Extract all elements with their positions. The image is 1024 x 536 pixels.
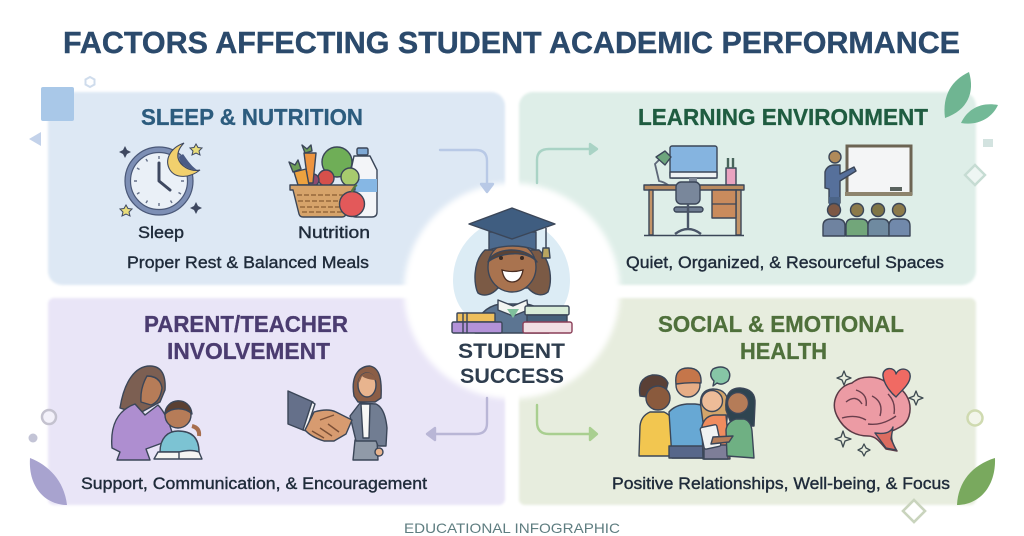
leaves: top right: [944, 72, 998, 124]
icon: basket of food and milk: [289, 145, 377, 217]
panel: social and emotional health background: [519, 298, 976, 505]
student success label: SUCCESS: [460, 365, 564, 388]
description: social and emotional health: Positive Relationships, Well-being, & Focus: [612, 474, 950, 493]
arrow: sleep to student: [440, 150, 493, 192]
heading: social and emotional health: [658, 311, 904, 364]
student success label: [458, 340, 565, 388]
student success label: STUDENT: [458, 340, 565, 363]
icon: clock and moon: [119, 143, 202, 216]
description: parent teacher involvement: Support, Communication, & Encouragement: [81, 474, 427, 493]
arrow: student to learning environment: [537, 144, 597, 183]
heading: parent teacher involvement: PARENT/TEACHER: [144, 311, 348, 337]
icon: brain with heart: [834, 369, 923, 456]
heading: learning environment: LEARNING ENVIRONMENT: [638, 104, 928, 130]
student illustration: [469, 208, 555, 333]
central white circle: [404, 183, 620, 399]
central student figure: [452, 208, 572, 388]
footer label: EDUCATIONAL INFOGRAPHIC: [404, 520, 620, 536]
leaf: bottom left purple: [30, 458, 67, 505]
heading: social and emotional health: SOCIAL & EMOTIONAL: [658, 311, 904, 337]
label: sleep: Sleep: [138, 223, 184, 242]
heading: social and emotional health: HEALTH: [740, 338, 827, 364]
heading: parent teacher involvement: [144, 311, 348, 364]
halo circle: [453, 219, 570, 315]
heading: parent teacher involvement: INVOLVEMENT: [167, 338, 330, 364]
panel: learning environment background: [519, 92, 976, 285]
icon: desk with computer: [644, 146, 744, 236]
arrow: student to social health: [537, 405, 597, 440]
panel: sleep and nutrition background: [48, 92, 505, 285]
icon: teacher at whiteboard with students: [823, 146, 912, 236]
decorative background shapes: [28, 77, 993, 522]
arrow: student to parent teacher: [427, 398, 487, 440]
panel: parent teacher involvement background: [48, 298, 505, 505]
description: sleep and nutrition: Proper Rest & Balanced Meals: [127, 253, 369, 272]
icon: parent reading with child: [112, 366, 202, 460]
icon: handshake with teacher: [288, 366, 387, 460]
icon: group of friends: [639, 367, 755, 459]
description: learning environment: Quiet, Organized, & Resourceful Spaces: [626, 253, 944, 272]
title: FACTORS AFFECTING STUDENT ACADEMIC PERFORMANCE: [63, 25, 960, 60]
heading: sleep and nutrition: SLEEP & NUTRITION: [141, 104, 363, 130]
leaf: bottom right green: [957, 458, 995, 505]
stacks of books: [452, 306, 572, 333]
label: nutrition: Nutrition: [298, 223, 370, 242]
